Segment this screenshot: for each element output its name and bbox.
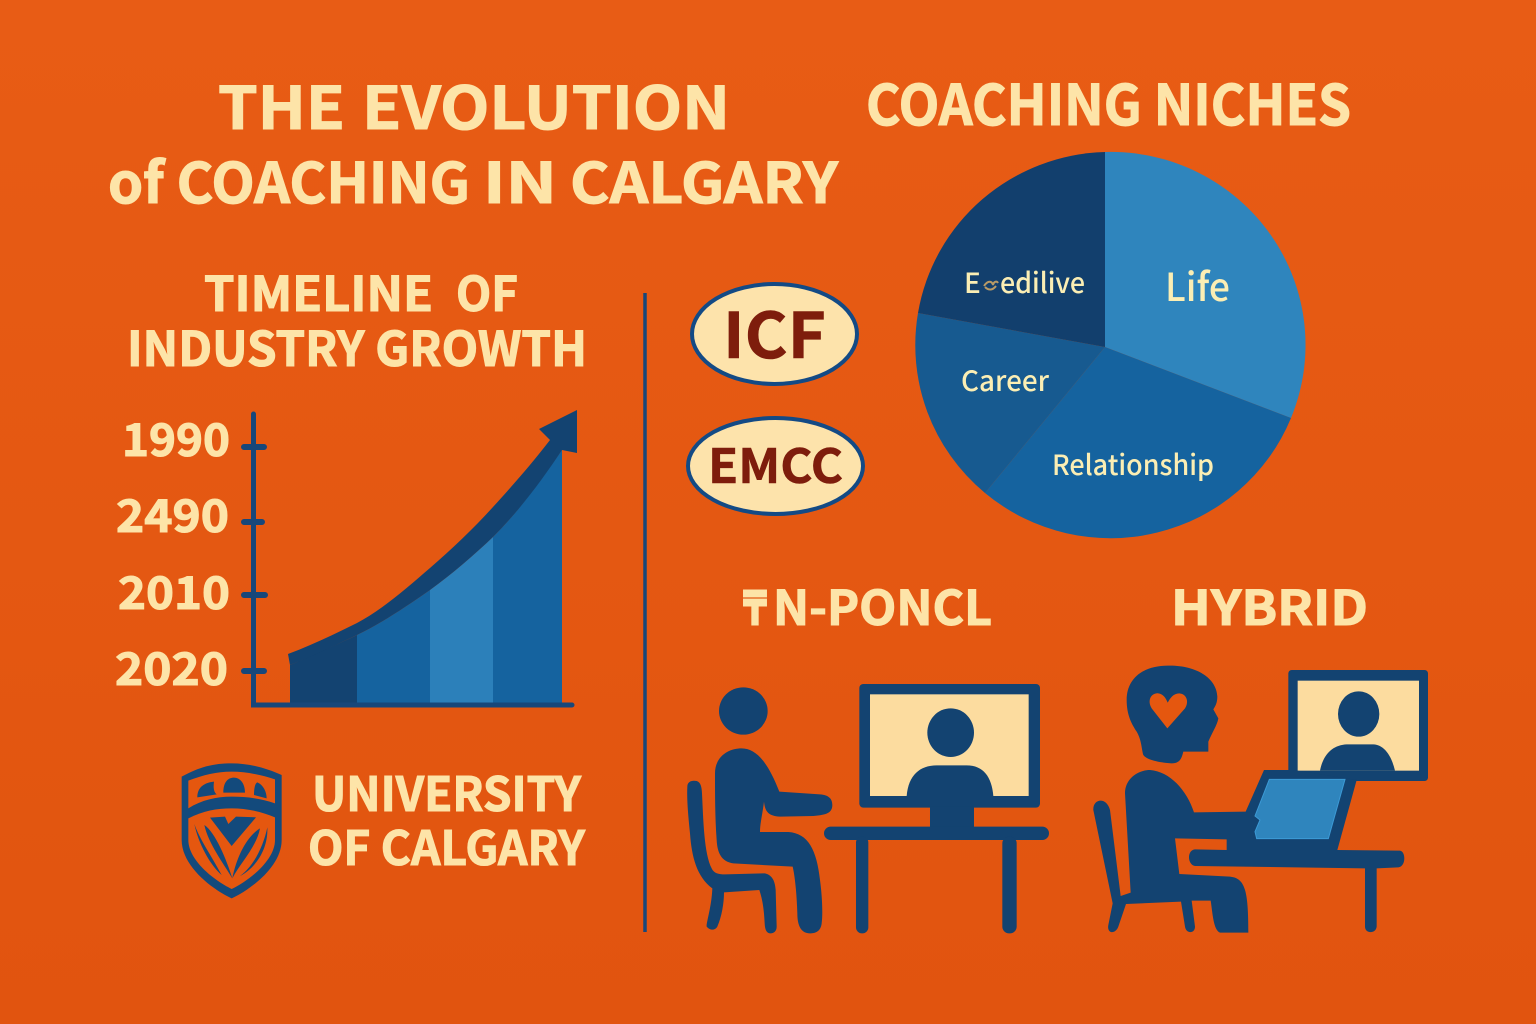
year labels <box>115 404 230 698</box>
university name <box>308 756 586 879</box>
monitor <box>1288 670 1428 781</box>
heading: timeline of industry growth <box>127 255 587 380</box>
heading: timeline of industry growth: INDUSTRY GROWTH <box>127 310 587 380</box>
badge: ICF: ICF <box>723 286 826 377</box>
heading: hybrid format: HYBRID <box>1171 569 1368 639</box>
year labels: 1990 <box>122 404 230 469</box>
growth chart <box>244 410 577 705</box>
university name: UNIVERSITY <box>312 756 582 825</box>
desk <box>824 807 1049 933</box>
chart segment 3 <box>430 537 493 704</box>
axes <box>244 414 572 705</box>
icon: online coaching at desk <box>687 684 1049 933</box>
chart segment 4 <box>493 450 562 704</box>
university name: OF CALGARY <box>308 810 586 879</box>
pie chart: coaching niches <box>915 152 1306 538</box>
university of calgary crest <box>182 763 282 898</box>
slice: executive <box>918 152 1105 347</box>
monitor <box>859 684 1040 808</box>
heading: timeline of industry growth: OF <box>456 255 518 325</box>
title: of COACHING <box>108 139 470 220</box>
laptop screen <box>1255 779 1345 839</box>
slice: career <box>915 313 1105 493</box>
title: CALGARY <box>570 139 839 220</box>
heading: online format: N-PONCL <box>773 569 992 639</box>
badge: EMCC <box>688 418 863 514</box>
heading: timeline of industry growth: TIMELINE <box>204 255 433 325</box>
chart segment 2 <box>357 590 430 704</box>
badge: ICF <box>692 284 857 384</box>
head with heart <box>1127 666 1218 763</box>
slice: life <box>1105 152 1306 418</box>
title <box>108 61 839 220</box>
chair <box>687 781 777 933</box>
heading: coaching niches: COACHING NICHES <box>866 61 1351 142</box>
vertical divider <box>643 293 647 932</box>
label: executive: edilive <box>1000 262 1085 302</box>
year labels: 2020 <box>115 633 228 698</box>
chart segment 1 <box>290 635 357 704</box>
title: EVOLUTION <box>362 61 730 146</box>
title: IN <box>483 139 557 220</box>
year labels: 2010 <box>118 557 230 622</box>
badge: EMCC: EMCC <box>708 428 843 497</box>
slice: relationship <box>985 347 1291 538</box>
label: relationship: Relationship <box>1052 444 1214 484</box>
year labels: 2490 <box>116 480 229 545</box>
growth arrow <box>288 410 577 665</box>
person <box>715 687 832 933</box>
person, chair and desk <box>1093 770 1404 933</box>
label: life: Life <box>1165 257 1230 313</box>
label: executive: E <box>964 262 981 302</box>
label: executive <box>964 262 1085 302</box>
label: career: Career <box>961 360 1050 400</box>
heading: online format: ₸ <box>743 581 767 637</box>
icon: hybrid coaching with laptop <box>1093 666 1428 933</box>
title: THE <box>218 61 345 146</box>
